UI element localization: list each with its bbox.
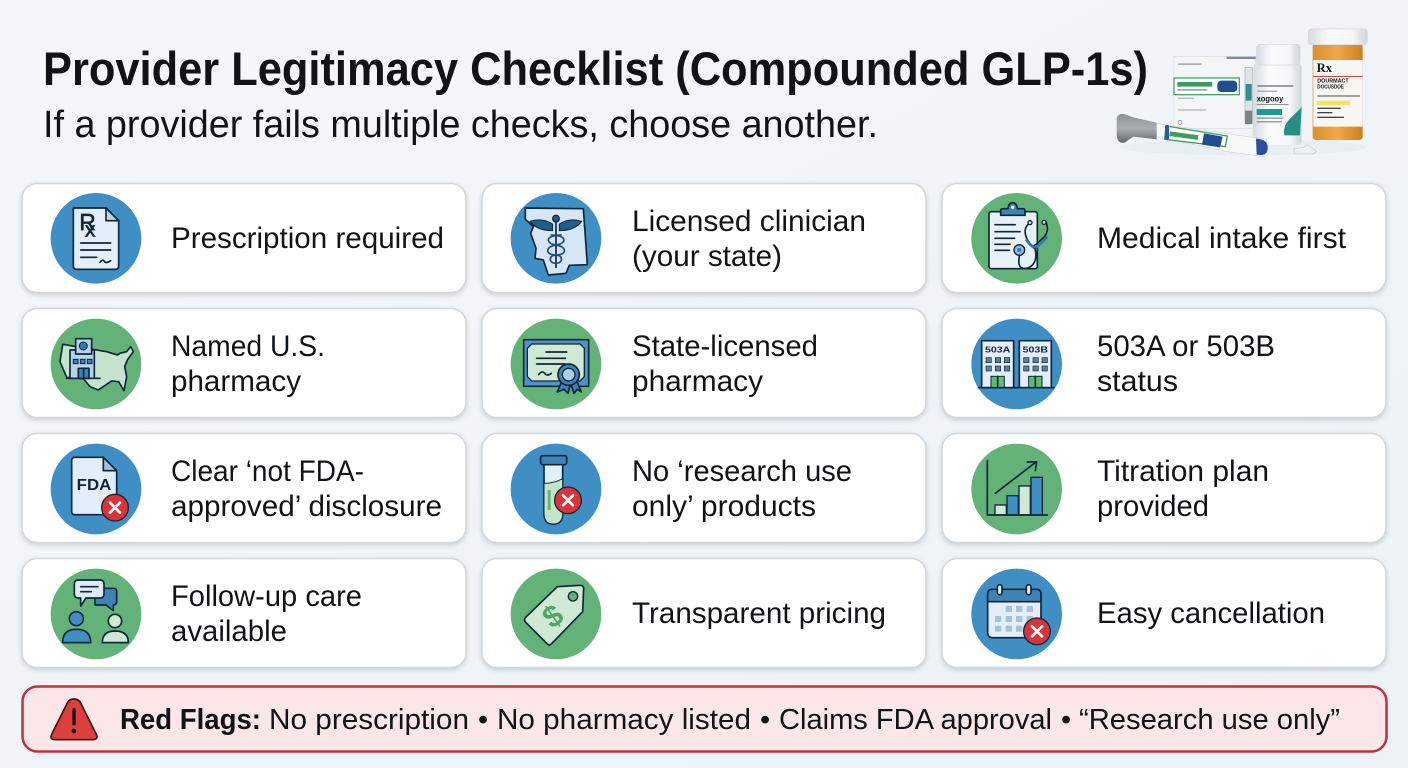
- label: available: [171, 615, 287, 648]
- panel: not FDA-approved disclosure: [22, 434, 466, 542]
- icon: test tube with red X: [511, 444, 601, 534]
- label: (your state): [632, 240, 782, 273]
- icon: framed certificate with ribbon: [511, 319, 601, 409]
- icon: warning triangle: [51, 699, 97, 740]
- red flags text: •: [478, 704, 488, 736]
- red flags text: Red Flags:: [120, 704, 261, 736]
- label: No ‘research use: [632, 455, 852, 488]
- label: [171, 580, 362, 648]
- icon: calendar with red X: [971, 569, 1062, 659]
- panel: transparent pricing: [482, 558, 926, 668]
- icon: two people in conversation: [51, 569, 141, 659]
- label: Titration plan: [1097, 455, 1269, 488]
- label: Clear ‘not FDA-: [171, 455, 364, 488]
- icon: two compounding facilities: [971, 319, 1062, 409]
- icon: FDA document with red X: FDA: [77, 477, 112, 494]
- icon: dollar price tag: [511, 569, 601, 659]
- icon: FDA document with red X: [51, 444, 141, 534]
- label: Transparent pricing: [632, 597, 886, 630]
- label: [632, 455, 852, 523]
- icon: rising bar chart: [971, 444, 1062, 534]
- panel: state-licensed pharmacy: [482, 308, 926, 418]
- title: Provider Legitimacy Checklist (Compounded GLP-1s): [43, 42, 1148, 95]
- panel: licensed clinician: [482, 184, 926, 292]
- label: [632, 330, 818, 398]
- label: Prescription required: [171, 222, 444, 255]
- label: 503A or 503B: [1097, 330, 1275, 363]
- callout: red flags: [22, 686, 1386, 752]
- label: [1097, 330, 1275, 398]
- label: [171, 455, 442, 523]
- red flags text: •: [760, 704, 770, 736]
- red flags text: Claims FDA approval: [779, 704, 1052, 736]
- label: provided: [1097, 490, 1209, 523]
- product photo: medication packaging: DOCUSDOE: [1317, 84, 1344, 90]
- red flags text: •: [1061, 704, 1071, 736]
- icon: prescription document: x: [85, 219, 96, 242]
- panel: follow-up care available: [22, 558, 466, 668]
- icon: prescription document: R: [79, 209, 96, 235]
- label: only’ products: [632, 490, 816, 523]
- label: [632, 205, 866, 273]
- product photo: medication packaging: [1117, 29, 1367, 157]
- product photo: medication packaging: Rx: [1317, 61, 1333, 75]
- panel: no research use only products: [482, 434, 926, 542]
- label: Medical intake first: [1097, 222, 1347, 255]
- panel: medical intake first: [942, 184, 1386, 292]
- label: pharmacy: [171, 365, 301, 398]
- icon: U.S. map with pharmacy building: [51, 319, 141, 409]
- label: status: [1097, 365, 1178, 398]
- icon: state outline with caduceus: [511, 193, 601, 284]
- panel: prescription required: [22, 184, 466, 292]
- icon: clipboard and stethoscope: [971, 193, 1062, 284]
- panel: 503A or 503B status: [942, 308, 1386, 418]
- label: State-licensed: [632, 330, 818, 363]
- icon: two compounding facilities: 503B: [1023, 345, 1048, 355]
- label: pharmacy: [632, 365, 763, 398]
- product photo: medication packaging: DOURMACT: [1317, 79, 1349, 85]
- label: Licensed clinician: [632, 205, 866, 238]
- subtitle: If a provider fails multiple checks, choose another.: [43, 104, 878, 146]
- label: Follow-up care: [171, 580, 362, 613]
- label: [1097, 455, 1269, 523]
- red flags text: [120, 704, 1340, 736]
- red flags text: No prescription: [269, 704, 469, 736]
- panel: titration plan provided: [942, 434, 1386, 542]
- icon: two compounding facilities: 503A: [985, 345, 1010, 355]
- icon: dollar price tag: $: [536, 598, 570, 635]
- red flags text: “Research use only”: [1079, 704, 1340, 736]
- label: Easy cancellation: [1097, 597, 1325, 630]
- label: approved’ disclosure: [171, 490, 442, 523]
- product photo: medication packaging: xogooy: [1257, 94, 1284, 103]
- panel: named U.S. pharmacy: [22, 308, 466, 418]
- red flags text: No pharmacy listed: [497, 704, 751, 736]
- icon: prescription document: [51, 193, 141, 284]
- label: [171, 330, 325, 398]
- panel: easy cancellation: [942, 558, 1386, 668]
- label: Named U.S.: [171, 330, 325, 363]
